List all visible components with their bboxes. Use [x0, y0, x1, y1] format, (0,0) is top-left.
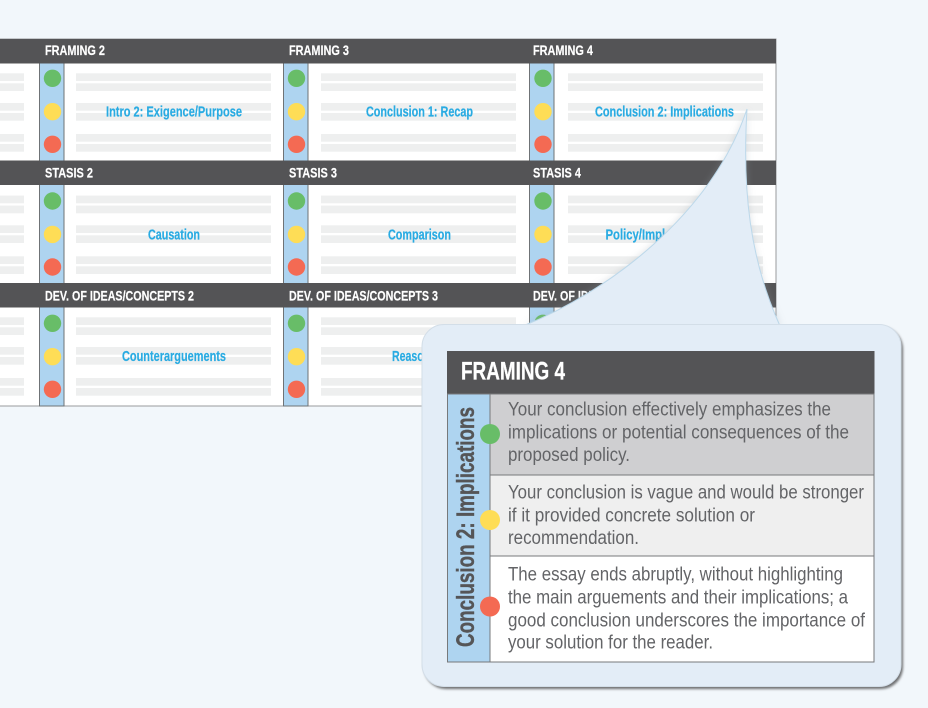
callout: zoomed rubric card: [422, 109, 903, 689]
rating row: strong: implications or potential consequences of the: [508, 422, 849, 444]
traffic light dots: [44, 70, 552, 398]
rating row: strong: proposed policy.: [508, 445, 630, 466]
yellow dot: [480, 510, 500, 530]
header bars: [0, 39, 776, 308]
cell labels: Comparison: [388, 228, 451, 244]
rating row: weak: The essay ends abruptly, without highlighting: [508, 564, 843, 586]
rating row: weak: [490, 556, 874, 662]
card header: [447, 351, 874, 394]
column and row headings: FRAMING 2: [45, 42, 105, 58]
row 2 text placeholder bars: [0, 196, 763, 274]
card table: [447, 351, 874, 662]
column and row headings: FRAMING 3: [289, 42, 349, 58]
rating row: developing: Your conclusion is vague and would be stronger: [508, 482, 865, 504]
rating row: developing: if it provided concrete solution or: [508, 506, 756, 526]
cell labels: Counterarguements: [122, 349, 226, 365]
card: [422, 324, 901, 686]
red dot: [480, 596, 500, 616]
rubric grid: [0, 39, 776, 406]
rating row: weak: the main arguements and their implications; a: [508, 588, 848, 608]
rating row: strong: Your conclusion effectively emphasizes the: [508, 400, 831, 420]
rating row: weak: your solution for the reader.: [508, 632, 713, 654]
cell labels: Reasoning: [392, 349, 446, 365]
cell labels: Policy/Implementation: [606, 228, 726, 244]
card shadow: [424, 327, 903, 689]
rating row: weak: good conclusion underscores the importance of: [508, 610, 866, 632]
rating row: strong: [490, 394, 874, 475]
cell labels: Causation: [148, 228, 200, 244]
green dot: [480, 424, 500, 444]
column and row headings: DEV. OF IDEAS/CONCEPTS 3: [289, 288, 438, 304]
callout tail shadow: [523, 109, 780, 326]
card side label: [448, 394, 490, 662]
callout tail: [523, 109, 780, 326]
column and row headings: [45, 42, 682, 304]
cell labels: Intro 2: Exigence/Purpose: [106, 104, 242, 120]
card header: FRAMING 4: [461, 358, 565, 386]
row 1 text placeholder bars: [0, 73, 763, 152]
column and row headings: DEV. OF IDEAS/CONCEPTS 2: [45, 288, 194, 304]
rating row: developing: recommendation.: [508, 528, 639, 549]
blue indicator columns: [40, 63, 554, 406]
column and row headings: STASIS 3: [289, 164, 337, 180]
column and row headings: FRAMING 4: [533, 42, 593, 58]
rating row: developing: [490, 475, 874, 556]
card side label: Conclusion 2: Implications: [452, 407, 480, 647]
column and row headings: STASIS 4: [533, 164, 581, 180]
row 3 text placeholder bars: [0, 317, 763, 396]
column and row headings: STASIS 2: [45, 164, 93, 180]
cell labels: Conclusion 1: Recap: [366, 104, 473, 120]
column and row headings: DEV. OF IDEAS/CONCEPTS 4: [533, 288, 682, 304]
cell labels: Conclusion 2: Implications: [595, 104, 734, 120]
cell labels: [106, 104, 734, 365]
